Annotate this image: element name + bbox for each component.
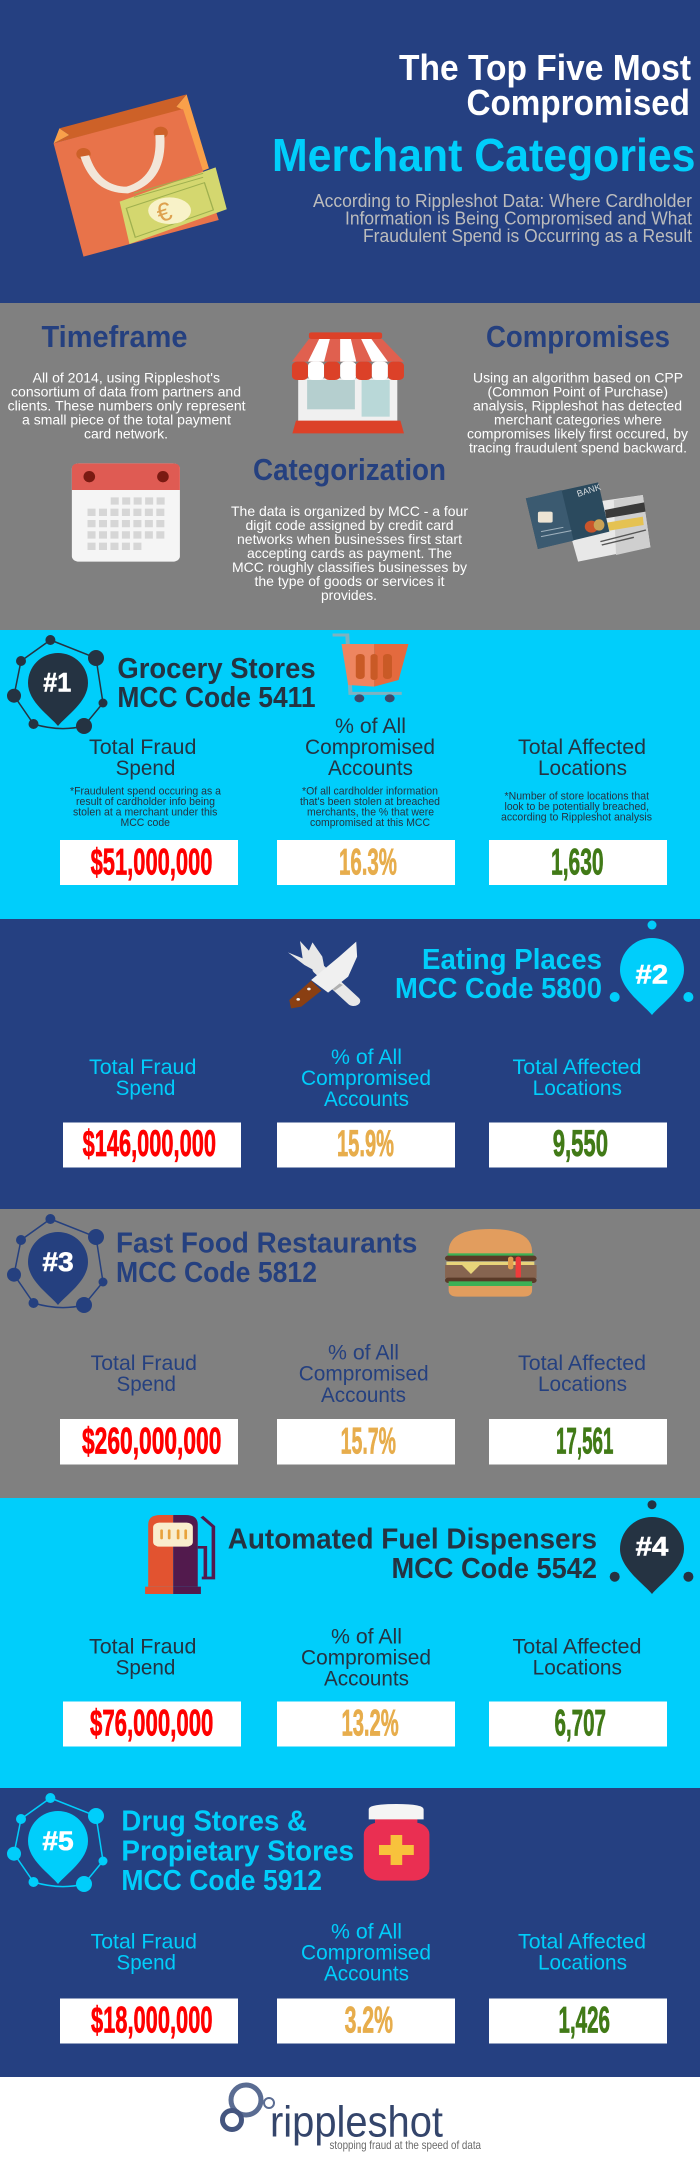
column: total fraud spend: Spend bbox=[116, 1657, 175, 1680]
text: timeframe: clients. These numbers only represent bbox=[8, 398, 246, 414]
icon: medicine jar bbox=[364, 1804, 429, 1881]
subtitle bbox=[313, 191, 692, 246]
column: total fraud spend: $51,000,000 bbox=[91, 841, 212, 882]
column: compromised accounts bbox=[277, 1342, 455, 1464]
heading: eating places: Eating Places bbox=[422, 944, 602, 976]
column: total fraud spend: Spend bbox=[116, 1952, 176, 1975]
text: compromises: compromises likely first occured, by bbox=[467, 426, 688, 442]
panel: #3 fast food restaurants bbox=[0, 1209, 700, 1498]
panel: header bbox=[0, 0, 700, 303]
column: total fraud spend: Spend bbox=[116, 1373, 176, 1396]
column: compromised accounts: compromised at this MCC bbox=[310, 817, 430, 829]
text: timeframe bbox=[8, 370, 246, 442]
panel: footer logo bbox=[0, 2077, 700, 2165]
column: affected locations: Locations bbox=[538, 1373, 627, 1396]
text: compromises: analysis, Rippleshot has detected bbox=[473, 398, 682, 414]
icon: #1 pin badge: #1 bbox=[43, 668, 71, 698]
column: affected locations: Total Affected bbox=[518, 1352, 646, 1375]
column: compromised accounts: Accounts bbox=[324, 1667, 409, 1690]
icon: #3 pin badge bbox=[7, 1214, 108, 1313]
column: compromised accounts bbox=[277, 1625, 455, 1746]
heading: grocery stores bbox=[117, 653, 316, 714]
icon: shopping bag with money: € bbox=[153, 195, 176, 228]
column: compromised accounts: Compromised bbox=[301, 1941, 431, 1964]
heading: timeframe: Timeframe bbox=[42, 319, 188, 354]
column: compromised accounts: Compromised bbox=[299, 1363, 429, 1386]
column: total fraud spend: $260,000,000 bbox=[82, 1420, 221, 1461]
text: categorization: The data is organized by MCC - a four bbox=[231, 503, 468, 519]
icon: #3 pin badge: #3 bbox=[42, 1247, 74, 1277]
heading: automated fuel dispensers: MCC Code 5542 bbox=[392, 1553, 597, 1585]
icon: #1 pin badge bbox=[7, 635, 108, 734]
icon: shopping cart bbox=[333, 635, 408, 702]
column: compromised accounts: *Of all cardholder information bbox=[302, 785, 438, 797]
heading: eating places bbox=[395, 944, 602, 1005]
column: compromised accounts: Accounts bbox=[328, 757, 413, 780]
text: categorization: digit code assigned by credit card bbox=[246, 517, 454, 533]
heading: drug stores: MCC Code 5912 bbox=[121, 1865, 322, 1897]
icon: burger bbox=[445, 1229, 537, 1297]
column: compromised accounts: % of All bbox=[328, 1342, 399, 1365]
column: compromised accounts bbox=[277, 1046, 455, 1168]
column: affected locations: Total Affected bbox=[518, 1931, 646, 1954]
column: affected locations bbox=[489, 1636, 667, 1746]
column: compromised accounts: % of All bbox=[331, 1046, 402, 1069]
column: affected locations: 1,426 bbox=[558, 1999, 610, 2040]
column: compromised accounts: 15.9% bbox=[337, 1123, 394, 1164]
heading: automated fuel dispensers bbox=[228, 1524, 597, 1585]
text: categorization: networks when businesses first start bbox=[237, 531, 462, 547]
column: total fraud spend bbox=[60, 1931, 238, 2044]
heading: automated fuel dispensers: Automated Fuel Dispensers bbox=[228, 1524, 597, 1556]
column: compromised accounts bbox=[277, 1920, 455, 2044]
column: total fraud spend: Total Fraud bbox=[89, 1636, 196, 1659]
icon: fuel pump bbox=[145, 1515, 213, 1594]
text: timeframe: card network. bbox=[84, 426, 168, 442]
column: compromised accounts bbox=[277, 715, 455, 885]
title bbox=[272, 47, 696, 181]
icon: #4 pin badge bbox=[610, 1500, 693, 1594]
column: total fraud spend: Spend bbox=[116, 1077, 175, 1100]
column: compromised accounts: % of All bbox=[331, 1625, 402, 1648]
column: affected locations bbox=[489, 736, 667, 885]
column: affected locations: look to be potentially breached, bbox=[504, 801, 649, 813]
column: total fraud spend bbox=[63, 1056, 241, 1168]
heading: eating places: MCC Code 5800 bbox=[395, 973, 602, 1005]
column: compromised accounts: merchants, the % that were bbox=[307, 806, 434, 818]
column: affected locations: Locations bbox=[533, 1657, 622, 1680]
icon: storefront bbox=[292, 332, 404, 433]
column: total fraud spend: $146,000,000 bbox=[83, 1123, 216, 1164]
heading: fast food restaurants bbox=[116, 1228, 417, 1289]
column: compromised accounts: 16.3% bbox=[339, 841, 397, 882]
text: categorization: accepting cards as payment. The bbox=[247, 545, 452, 561]
heading: compromises: Compromises bbox=[486, 319, 670, 354]
heading: fast food restaurants: Fast Food Restaurants bbox=[116, 1228, 417, 1260]
heading: grocery stores: MCC Code 5411 bbox=[117, 682, 316, 714]
heading: drug stores: Drug Stores & bbox=[121, 1806, 307, 1838]
column: compromised accounts: that's been stolen at breached bbox=[300, 796, 440, 808]
column: total fraud spend: *Fraudulent spend occuring as a bbox=[70, 785, 222, 797]
heading: fast food restaurants: MCC Code 5812 bbox=[116, 1257, 317, 1289]
text: compromises: Using an algorithm based on CPP bbox=[473, 370, 683, 386]
icon: #5 pin badge: #5 bbox=[42, 1826, 74, 1856]
icon: rippleshot rings bbox=[222, 2085, 274, 2130]
column: compromised accounts: Accounts bbox=[324, 1962, 409, 1985]
panel: #5 drug stores bbox=[0, 1788, 700, 2077]
heading: categorization: Categorization bbox=[253, 452, 446, 487]
icon: bank cards bbox=[526, 482, 650, 562]
column: total fraud spend: $18,000,000 bbox=[91, 1999, 212, 2040]
column: total fraud spend: Spend bbox=[116, 757, 175, 780]
text: categorization: MCC roughly classifies businesses by bbox=[232, 559, 467, 575]
text: timeframe: All of 2014, using Rippleshot's bbox=[33, 370, 220, 386]
column: affected locations: Locations bbox=[538, 757, 627, 780]
column: affected locations bbox=[489, 1056, 667, 1168]
panel: #2 eating places bbox=[0, 919, 700, 1209]
column: affected locations: 17,561 bbox=[556, 1420, 613, 1461]
column: affected locations: *Number of store locations that bbox=[504, 790, 649, 802]
subtitle: Information is Being Compromised and What bbox=[345, 208, 692, 228]
column: affected locations: Locations bbox=[538, 1952, 627, 1975]
column: total fraud spend bbox=[63, 1636, 241, 1746]
column: total fraud spend: Total Fraud bbox=[91, 1352, 197, 1375]
column: total fraud spend: Total Fraud bbox=[89, 1056, 196, 1079]
column: compromised accounts: 3.2% bbox=[345, 1999, 393, 2040]
column: compromised accounts: Accounts bbox=[324, 1088, 409, 1111]
column: total fraud spend: result of cardholder info being bbox=[76, 796, 215, 808]
icon: crossed knife and fork bbox=[288, 941, 357, 1008]
text: timeframe: consortium of data from partners and bbox=[11, 384, 241, 400]
column: compromised accounts: % of All bbox=[335, 715, 406, 738]
icon: bank cards: BANK bbox=[576, 482, 602, 499]
column: affected locations: Total Affected bbox=[512, 1056, 642, 1079]
column: compromised accounts: Compromised bbox=[301, 1067, 431, 1090]
heading: drug stores: Propietary Stores bbox=[121, 1836, 354, 1868]
column: affected locations: according to Rippleshot analysis bbox=[501, 812, 652, 824]
text: compromises bbox=[467, 370, 688, 456]
column: total fraud spend bbox=[60, 736, 238, 885]
column: compromised accounts: Compromised bbox=[305, 736, 435, 759]
panel: methodology bbox=[0, 303, 700, 630]
column: compromised accounts: Compromised bbox=[301, 1646, 431, 1669]
column: compromised accounts: Accounts bbox=[321, 1384, 406, 1407]
column: compromised accounts: 13.2% bbox=[342, 1702, 399, 1743]
text: categorization bbox=[231, 503, 468, 603]
column: total fraud spend: MCC code bbox=[120, 817, 170, 829]
subtitle: Fraudulent Spend is Occurring as a Result bbox=[363, 226, 692, 246]
icon: #2 pin badge bbox=[610, 920, 693, 1015]
panel: #4 automated fuel dispensers bbox=[0, 1498, 700, 1788]
column: affected locations: Total Affected bbox=[512, 1636, 642, 1659]
text: compromises: (Common Point of Purchase) bbox=[488, 384, 668, 400]
logo tagline: stopping fraud at the speed of data bbox=[330, 2138, 481, 2152]
text: categorization: the type of goods or services it bbox=[254, 573, 445, 589]
column: affected locations bbox=[489, 1931, 667, 2044]
column: total fraud spend: stolen at a merchant under this bbox=[73, 806, 218, 818]
heading: drug stores bbox=[121, 1806, 354, 1897]
logo wordmark: rippleshot bbox=[270, 2098, 443, 2147]
column: affected locations: Total Affected bbox=[518, 736, 646, 759]
icon: #4 pin badge: #4 bbox=[636, 1531, 668, 1561]
icon: calendar bbox=[72, 463, 180, 562]
column: compromised accounts: % of All bbox=[331, 1920, 402, 1943]
heading: grocery stores: Grocery Stores bbox=[117, 653, 316, 685]
column: affected locations: 6,707 bbox=[554, 1702, 606, 1743]
text: compromises: tracing fraudulent spend backward. bbox=[469, 440, 687, 456]
column: affected locations: 1,630 bbox=[551, 841, 604, 882]
subtitle: According to Rippleshot Data: Where Cardholder bbox=[313, 191, 692, 211]
column: total fraud spend: $76,000,000 bbox=[90, 1702, 213, 1743]
icon: shopping bag with money bbox=[54, 94, 227, 257]
column: affected locations bbox=[489, 1352, 667, 1464]
column: affected locations: Locations bbox=[533, 1077, 622, 1100]
icon: #2 pin badge: #2 bbox=[636, 959, 668, 989]
text: categorization: provides. bbox=[321, 587, 377, 603]
column: total fraud spend: Total Fraud bbox=[89, 736, 196, 759]
text: timeframe: a small piece of the total payment bbox=[22, 412, 231, 428]
column: affected locations: 9,550 bbox=[553, 1123, 608, 1164]
icon: #5 pin badge bbox=[7, 1793, 108, 1892]
text: compromises: merchant categories where bbox=[494, 412, 662, 428]
panel: #1 grocery stores bbox=[0, 630, 700, 919]
column: compromised accounts: 15.7% bbox=[341, 1420, 396, 1461]
column: total fraud spend: Total Fraud bbox=[91, 1931, 197, 1954]
column: total fraud spend bbox=[60, 1352, 238, 1464]
